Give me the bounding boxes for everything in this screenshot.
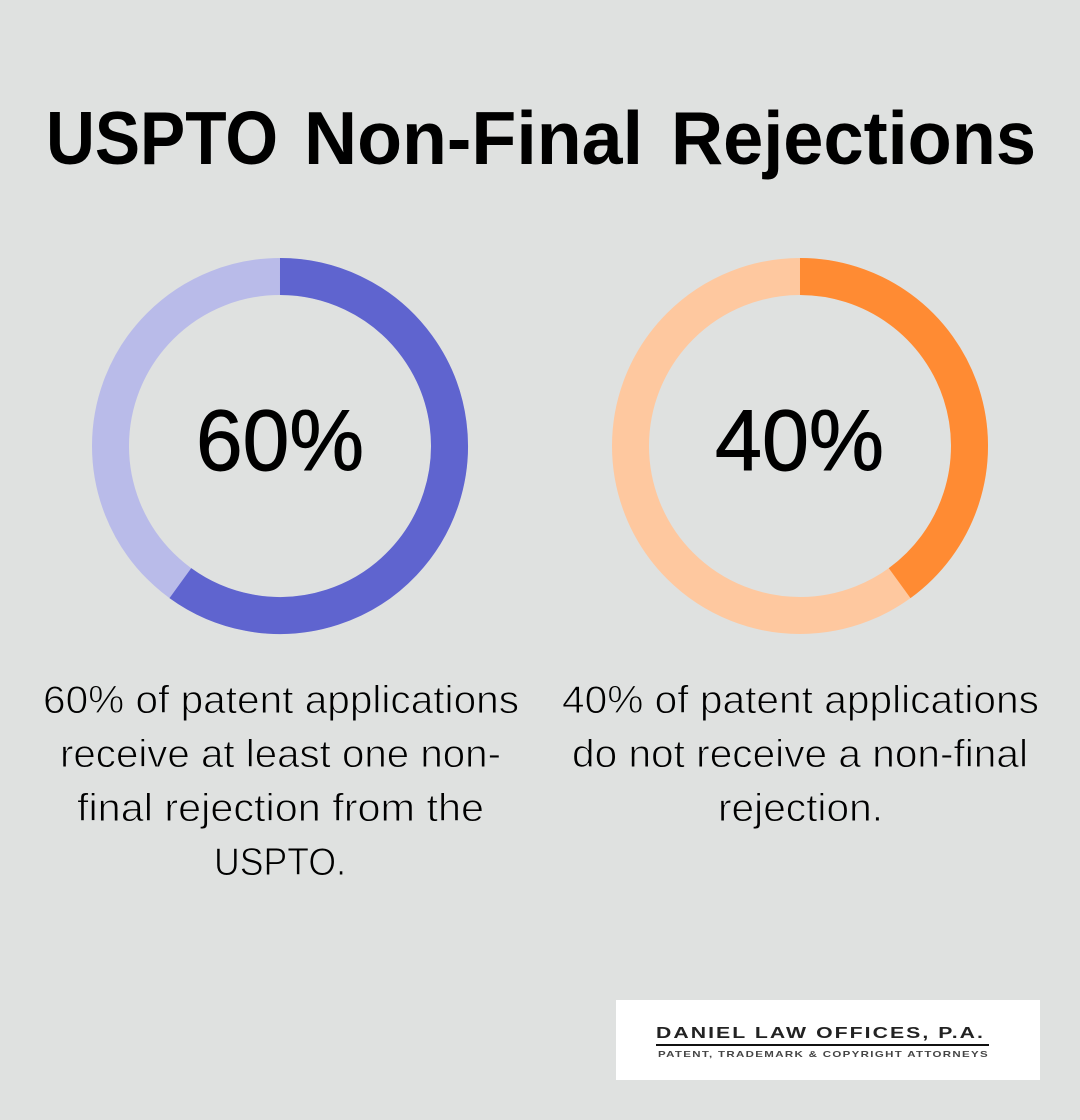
panel: 60 percent statistic xyxy=(43,276,519,884)
logo: Daniel Law Offices: PATENT, TRADEMARK & COPYRIGHT ATTORNEYS xyxy=(658,1049,989,1059)
logo: Daniel Law Offices: DANIEL LAW OFFICES, P.A. xyxy=(656,1025,985,1042)
panel: 40 percent statistic xyxy=(562,276,1039,830)
title: Rejections xyxy=(671,96,1036,180)
description: 40 percent: do not receive a non-final xyxy=(572,733,1028,776)
description: 60 percent: receive at least one non- xyxy=(60,733,501,776)
logo: Daniel Law Offices xyxy=(616,1000,1040,1080)
description: 40 percent xyxy=(562,679,1039,830)
donut chart: 60 percent xyxy=(110,276,450,616)
title: Non-Final xyxy=(304,96,643,180)
description: 60 percent xyxy=(43,679,519,884)
description: 60 percent: USPTO. xyxy=(214,841,346,884)
description: 60 percent: 60% of patent applications xyxy=(43,679,519,722)
donut chart: 40 percent xyxy=(630,276,970,616)
description: 40 percent: 40% of patent applications xyxy=(562,679,1039,722)
title xyxy=(46,96,1036,180)
description: 40 percent: rejection. xyxy=(718,787,883,830)
value: 60%: 60% xyxy=(196,393,364,489)
value: 40%: 40% xyxy=(715,393,884,489)
title: USPTO xyxy=(46,96,278,180)
description: 60 percent: final rejection from the xyxy=(77,787,484,830)
